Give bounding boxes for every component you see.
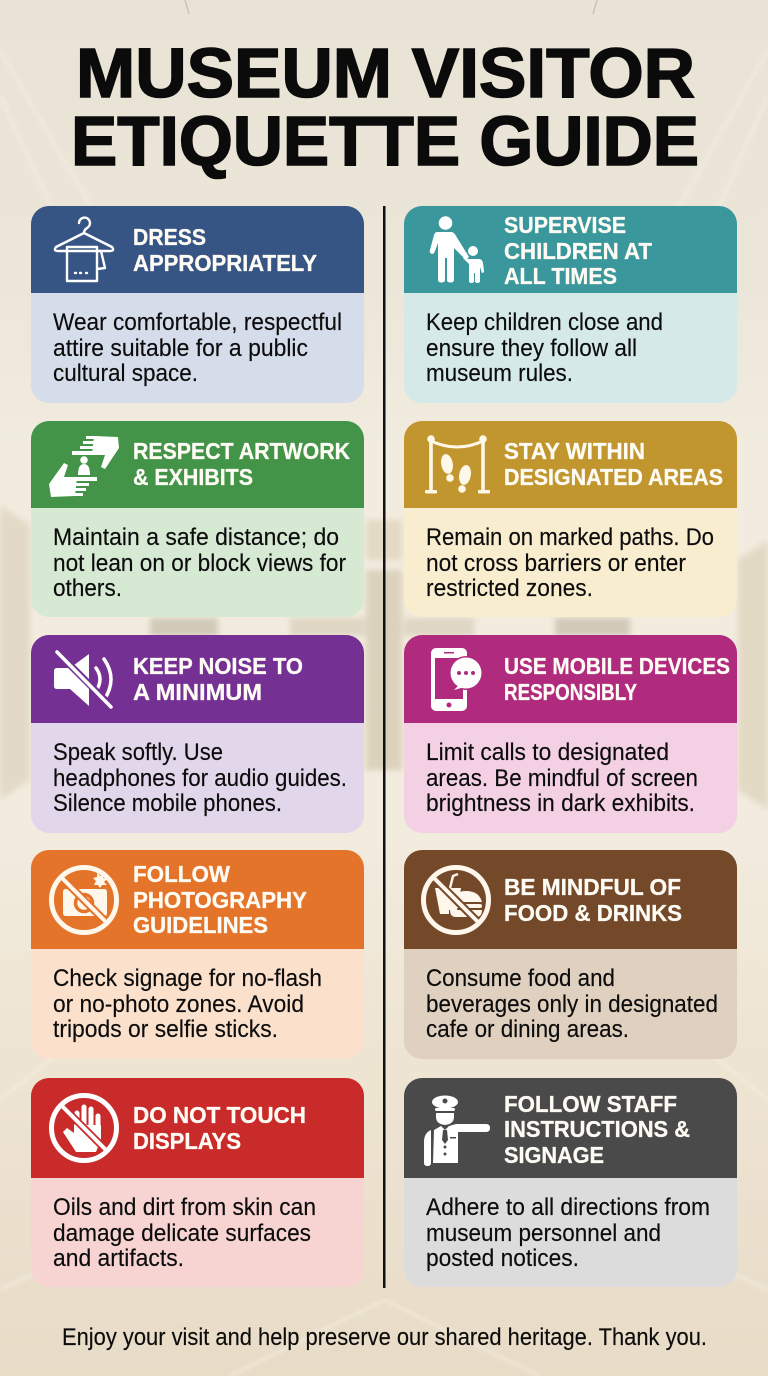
icon: no camera: [52, 868, 116, 932]
heading: A MINIMUM: [133, 679, 262, 705]
body text: not cross barriers or enter: [426, 550, 686, 577]
footer message: Enjoy your visit and help preserve our shared heritage. Thank you.: [62, 1324, 707, 1351]
heading: RESPONSIBLY: [504, 679, 637, 705]
center divider line: [383, 206, 386, 1288]
heading: [504, 438, 723, 490]
title: ETIQUETTE GUIDE: [71, 102, 699, 180]
icon: parent and child: [430, 216, 484, 283]
body text: Remain on marked paths. Do: [426, 524, 714, 551]
body text: museum rules.: [426, 360, 573, 387]
heading: STAY WITHIN: [504, 438, 645, 464]
body text: [53, 524, 346, 602]
body text: [426, 524, 714, 602]
heading: APPROPRIATELY: [133, 250, 317, 276]
body text: Oils and dirt from skin can: [53, 1194, 316, 1221]
heading: [133, 653, 303, 705]
icon: framing hands: [49, 436, 119, 497]
heading: [504, 653, 730, 705]
body text: others.: [53, 575, 122, 602]
panel: follow photography guidelines: [31, 850, 364, 1059]
body text: Maintain a safe distance; do: [53, 524, 339, 551]
body text: Speak softly. Use: [53, 739, 223, 766]
heading: DO NOT TOUCH: [133, 1102, 306, 1128]
heading: DRESS: [133, 224, 206, 250]
body text: Silence mobile phones.: [53, 790, 282, 817]
heading: DESIGNATED AREAS: [504, 464, 723, 490]
body text: Adhere to all directions from: [426, 1194, 710, 1221]
icon: hanger with towel: [55, 218, 113, 281]
heading: PHOTOGRAPHY: [133, 887, 307, 913]
heading: [133, 861, 307, 938]
heading: [133, 1102, 306, 1154]
panel: do not touch displays: [31, 1078, 364, 1287]
body text: and artifacts.: [53, 1245, 184, 1272]
heading: SIGNAGE: [504, 1142, 604, 1168]
panel: dress appropriately: [31, 206, 364, 403]
body text: not lean on or block views for: [53, 550, 346, 577]
heading: INSTRUCTIONS &: [504, 1116, 690, 1142]
body text: museum personnel and: [426, 1220, 661, 1247]
body text: beverages only in designated: [426, 991, 718, 1018]
heading: FOOD & DRINKS: [504, 900, 682, 926]
body text: cultural space.: [53, 360, 198, 387]
body text: [426, 1194, 710, 1272]
body text: [53, 1194, 316, 1272]
body text: [426, 965, 718, 1043]
heading: DISPLAYS: [133, 1128, 241, 1154]
icon: rope barrier and footprints: [425, 435, 490, 494]
panel: follow staff instructions: [404, 1078, 737, 1287]
icon: no touching hand: [52, 1096, 116, 1160]
body text: Limit calls to designated: [426, 739, 669, 766]
body text: [53, 965, 322, 1043]
body text: or no-photo zones. Avoid: [53, 991, 304, 1018]
heading: ALL TIMES: [504, 263, 617, 289]
body text: restricted zones.: [426, 575, 593, 602]
heading: FOLLOW STAFF: [504, 1091, 677, 1117]
icon: museum guard pointing: [424, 1096, 490, 1166]
heading: [504, 1091, 690, 1168]
title: MUSEUM VISITOR: [76, 34, 695, 112]
heading: BE MINDFUL OF: [504, 874, 681, 900]
body text: headphones for audio guides.: [53, 765, 347, 792]
body text: [53, 309, 342, 387]
body text: Wear comfortable, respectful: [53, 309, 342, 336]
heading: [133, 224, 317, 276]
body text: ensure they follow all: [426, 335, 637, 362]
panel: be mindful of food and drinks: [404, 850, 737, 1059]
body text: posted notices.: [426, 1245, 579, 1272]
panel: stay within designated areas: [404, 421, 737, 617]
icon: phone with chat bubble: [431, 648, 483, 711]
body text: attire suitable for a public: [53, 335, 308, 362]
panel: supervise children: [404, 206, 737, 403]
body text: Keep children close and: [426, 309, 663, 336]
heading: GUIDELINES: [133, 912, 268, 938]
heading: [133, 438, 350, 490]
body text: brightness in dark exhibits.: [426, 790, 695, 817]
heading: CHILDREN AT: [504, 238, 652, 264]
icon: no food or drink: [424, 868, 488, 932]
panel: respect artwork: [31, 421, 364, 617]
heading: & EXHIBITS: [133, 464, 253, 490]
body text: [53, 739, 347, 817]
heading: RESPECT ARTWORK: [133, 438, 350, 464]
body text: Check signage for no-flash: [53, 965, 322, 992]
body text: damage delicate surfaces: [53, 1220, 311, 1247]
heading: USE MOBILE DEVICES: [504, 653, 730, 679]
panel: use mobile devices: [404, 635, 737, 833]
body text: areas. Be mindful of screen: [426, 765, 698, 792]
body text: cafe or dining areas.: [426, 1016, 629, 1043]
body text: Consume food and: [426, 965, 615, 992]
heading: FOLLOW: [133, 861, 230, 887]
title: [71, 34, 699, 180]
body text: tripods or selfie sticks.: [53, 1016, 278, 1043]
icon: muted speaker: [54, 652, 112, 707]
heading: SUPERVISE: [504, 212, 626, 238]
heading: [504, 874, 682, 926]
body text: [426, 739, 698, 817]
panel: keep noise to a minimum: [31, 635, 364, 833]
heading: [504, 212, 652, 289]
heading: KEEP NOISE TO: [133, 653, 303, 679]
body text: [426, 309, 663, 387]
